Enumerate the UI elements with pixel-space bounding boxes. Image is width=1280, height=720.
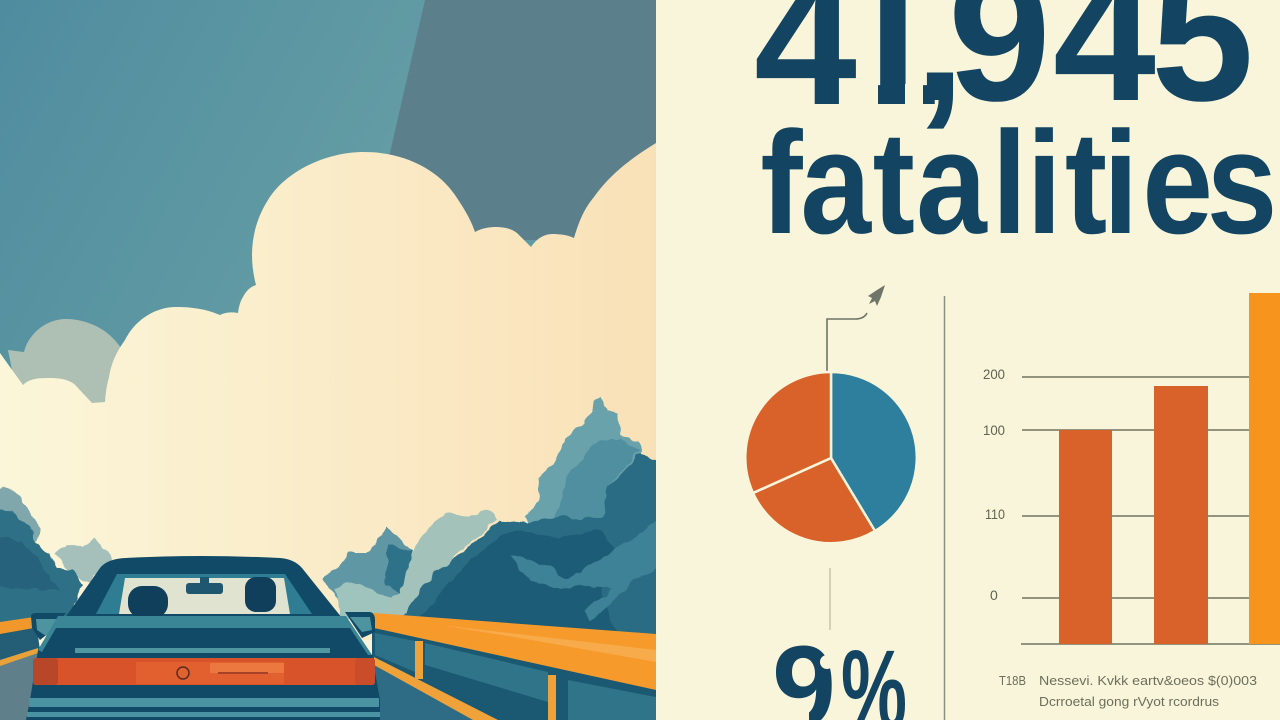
- far right tree tops: [525, 395, 642, 530]
- pie slice: orange lower: [753, 458, 875, 543]
- lower rail: [374, 657, 498, 720]
- right trees: [322, 397, 656, 634]
- side window frame: [96, 574, 312, 614]
- pie slice: orange upper: [745, 372, 831, 493]
- right trees dark clump: [385, 545, 413, 593]
- y axis labels: 200: [983, 366, 1005, 382]
- y axis labels: 110: [985, 506, 1005, 522]
- y axis labels: [983, 366, 1005, 603]
- large cream cloud: [0, 143, 656, 640]
- left trees dark layer: [0, 510, 83, 625]
- chart caption: [999, 674, 1257, 709]
- right headrest: [245, 577, 276, 612]
- tail light bar: [33, 658, 375, 685]
- rear window: [119, 578, 290, 614]
- headline number: [754, 0, 1254, 144]
- rearview mirror: [186, 583, 223, 594]
- panel 2: [425, 643, 548, 702]
- rail highlight: [440, 625, 656, 662]
- tail light centre: [136, 662, 284, 684]
- right guard rail: [374, 613, 656, 720]
- trunk stripe: [75, 648, 330, 653]
- left trees: [0, 485, 112, 625]
- left wing mirror: [31, 613, 66, 640]
- bar 1: [1059, 430, 1112, 644]
- pie chart: [745, 372, 917, 543]
- percentage stat: [765, 623, 907, 720]
- tail light left end: [33, 658, 58, 685]
- left headrest: [128, 586, 168, 618]
- bar chart: [983, 293, 1280, 644]
- panel 3: [568, 680, 656, 720]
- tail light right end: [355, 658, 375, 685]
- chart caption: Nessevi. Kvkk eartv&oeos $(0)003: [1039, 674, 1257, 688]
- road surface: [375, 665, 473, 720]
- gridlines: [1021, 377, 1280, 644]
- headline label: fatalities: [760, 101, 1277, 264]
- badge: [177, 667, 189, 679]
- road right: [372, 625, 656, 720]
- left trees light layer: [0, 486, 41, 543]
- trunk handle: [218, 672, 268, 674]
- left guard rail: [0, 617, 40, 666]
- right trees mid layer: [322, 526, 413, 600]
- lower bumper stripe: [27, 712, 380, 717]
- chart caption: T18B: [999, 674, 1026, 688]
- inner tree tops: [550, 440, 640, 525]
- panel 1: [375, 633, 415, 672]
- bumper stripe: [29, 698, 379, 707]
- icon: rocket with connector: [827, 285, 885, 372]
- roof: [65, 556, 342, 618]
- pie slice: blue: [831, 372, 917, 531]
- bar 2: [1154, 386, 1208, 644]
- darkest mass: [420, 530, 620, 640]
- post 1: [415, 641, 423, 679]
- shadow wedge in sky: [370, 0, 656, 240]
- bar 3: [1249, 293, 1280, 644]
- tree highlight: [510, 521, 656, 621]
- panel: statistics background: [656, 0, 1280, 720]
- vertical divider: [944, 296, 946, 720]
- right wing mirror: [345, 612, 375, 638]
- right trees dark layer: [403, 453, 656, 634]
- chart caption: Dcrroetal gong rVyot rcordrus: [1039, 695, 1219, 709]
- right trees pale layer: [388, 510, 498, 616]
- distant grey cloud: [8, 319, 122, 410]
- y axis labels: 100: [983, 422, 1005, 438]
- sky: [0, 0, 537, 370]
- pale clump: [333, 584, 390, 618]
- road left: [0, 653, 38, 720]
- post 2: [548, 675, 556, 720]
- panel: illustration of car on highway: [0, 0, 670, 720]
- y axis labels: 0: [990, 587, 998, 603]
- rail top bar: [374, 613, 656, 690]
- car: [26, 556, 380, 720]
- thin connector line: [829, 568, 831, 630]
- tail light highlight: [210, 663, 284, 673]
- car body: [26, 617, 380, 720]
- trunk lid edge: [38, 616, 372, 655]
- left trees shade: [0, 535, 60, 590]
- left trees pale layer: [55, 538, 112, 582]
